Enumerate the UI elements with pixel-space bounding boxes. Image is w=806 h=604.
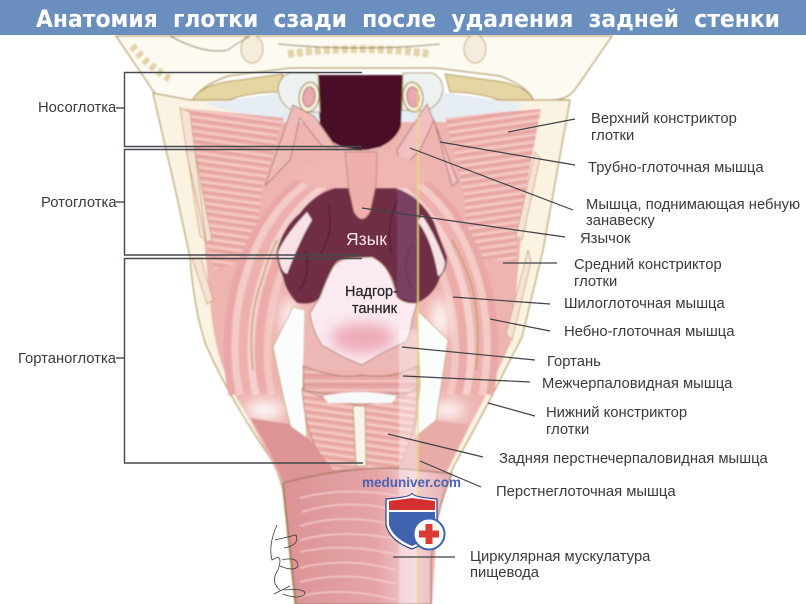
artist signature squiggle [271,525,305,597]
epiglottis centre [331,323,395,353]
nasopharynx cavity [317,75,403,151]
callout: levator veli palatini: занавеску [586,213,655,229]
callout: superior constrictor [508,111,737,144]
callout: middle constrictor: Средний констриктор [574,257,722,273]
blue-white tissue under skull [205,92,525,125]
callout: levator veli palatini: Мышца, поднимающая небную [586,197,800,213]
interarytenoid muscle [303,366,417,394]
callout: cricopharyngeus [420,461,676,500]
white gap under the arytenoids [323,392,397,403]
anatomical illustration of the pharynx [116,35,612,604]
white openings of the auditory tubes [278,73,443,113]
label: nasopharynx: Носоглотка [38,100,117,116]
esophagus fibres [300,491,400,600]
bracket: laryngopharynx [18,258,363,463]
callout: stylopharyngeus [453,296,726,312]
larynx background [303,310,418,370]
callout: inferior constrictor: глотки [546,422,589,438]
callout: posterior cricoarytenoid: Задняя перстнечерпаловидная мышца [499,451,769,467]
muscle: upper constrictor right [445,109,541,262]
label: epiglottis: Надгор- [345,284,398,300]
piriform recess left [273,307,307,438]
bracket: oropharynx [41,150,362,255]
callout: inferior constrictor [488,403,687,438]
tonsil right [418,215,445,276]
esophagus [283,468,452,604]
callout: uvula: Язычок [580,231,631,247]
callout: cricopharyngeus: Перстнеглоточная мышца [496,484,676,500]
piriform recess right [415,310,448,437]
label: oropharynx: Ротоглотка [41,195,117,211]
inferior constrictor right [397,420,470,482]
callout: posterior cricoarytenoid [388,434,769,467]
watermark text: meduniver.com [362,475,461,490]
tubopharyngeal muscles [265,104,458,186]
lighter image seam [399,330,417,604]
callout: levator veli palatini [410,148,800,229]
side bands right [506,152,540,340]
arch: palatopharyngeus right [378,160,495,395]
arch: palatopharyngeus left [227,160,345,395]
callout: salpingopharyngeus: Трубно-глоточная мышца [588,160,764,176]
uvula [345,152,377,219]
callout: circular esophagus muscle: пищевода [470,565,540,581]
tongue lobule lines [300,200,412,290]
callout: interarytenoid [403,376,733,392]
epiglottis [310,257,417,365]
callout: palatopharyngeus: Небно-глоточная мышца [564,324,735,340]
arch edge lines [251,240,478,370]
yellow seam line [417,86,419,604]
purple image strip [397,188,417,303]
side bands left [180,108,213,304]
midline white band [353,406,366,466]
callout: larynx: Гортань [547,354,601,370]
label: epiglottis: танник [352,301,398,317]
muscle: body of the pharynx [190,122,534,604]
callout: circular esophagus muscle [393,549,651,581]
icon: medical shield logo [386,493,444,550]
callout: interarytenoid: Межчерпаловидная мышца [542,376,733,392]
callout: superior constrictor: Верхний констриктор [591,111,737,127]
muscle: upper constrictor left [180,108,284,270]
label: tongue: Язык [346,229,387,249]
callout: stylopharyngeus: Шилоглоточная мышца [564,296,726,312]
callout: circular esophagus muscle: Циркулярная мускулатура [470,549,651,565]
posterior cricoarytenoid muscle [302,388,417,470]
callout: salpingopharyngeus [440,142,764,176]
callout: palatopharyngeus [490,319,735,340]
callout: larynx [402,347,601,370]
callout: superior constrictor: глотки [591,128,634,144]
pale fan under the arches [245,298,466,419]
callout: middle constrictor: глотки [574,274,617,290]
inferior constrictor left [250,418,335,482]
tongue [277,188,447,304]
callout: middle constrictor [503,257,722,290]
title bar [0,0,806,35]
callout: uvula [362,208,631,247]
label: laryngopharynx: Гортаноглотка [18,351,117,367]
neck outer band [153,93,570,604]
skull base [116,35,612,112]
bracket: nasopharynx [38,72,362,146]
soft palate [290,150,436,188]
callout: inferior constrictor: Нижний констриктор [546,405,687,421]
tonsil left [278,212,312,274]
